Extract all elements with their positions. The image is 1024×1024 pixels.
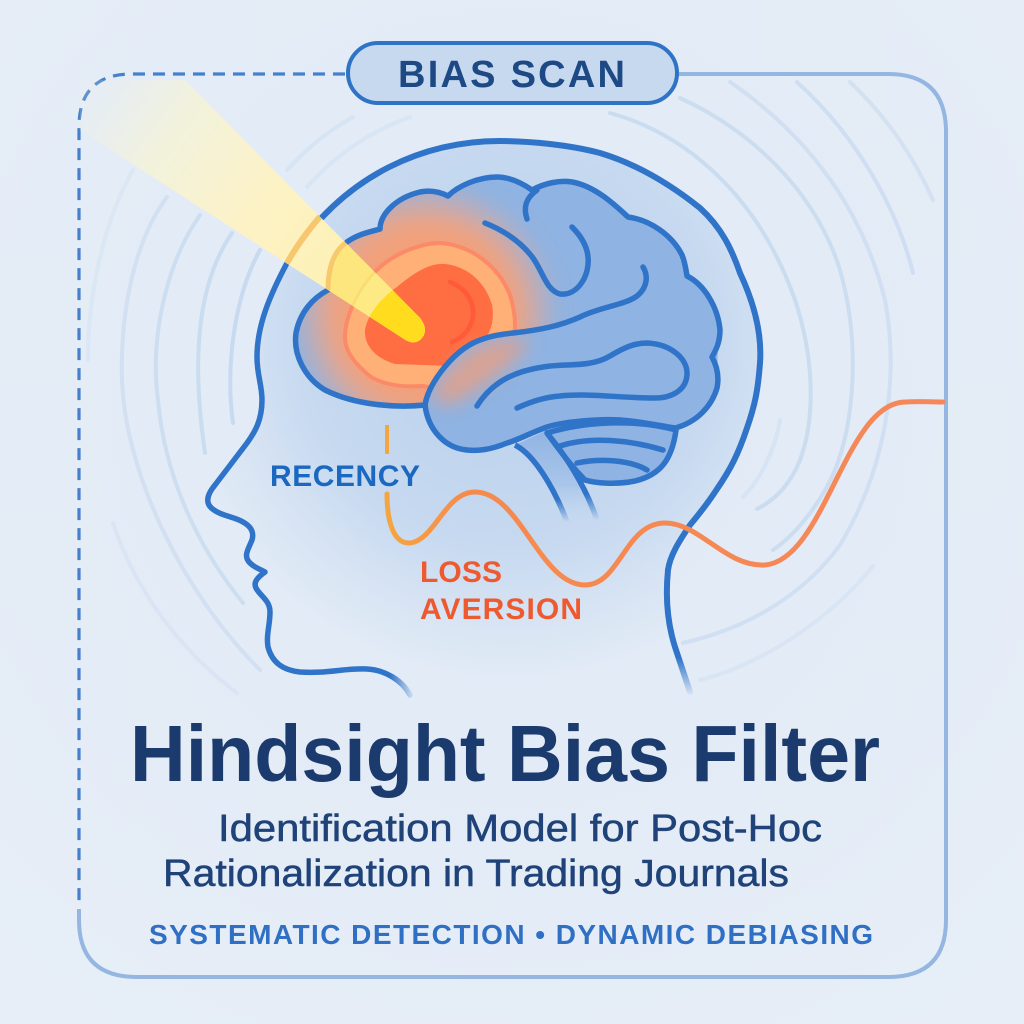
beam inside brain [328, 243, 425, 342]
head silhouette [208, 141, 760, 695]
stem left line [515, 445, 567, 522]
heat core [365, 264, 493, 366]
brain [290, 177, 720, 522]
stem right line [547, 433, 597, 520]
hot arc [450, 282, 473, 342]
heat ring [345, 243, 515, 395]
brain stem [515, 430, 597, 522]
beam inside ring [353, 283, 425, 342]
scanner beam [80, 80, 425, 342]
label: loss aversion [420, 556, 582, 626]
badge: bias scan [348, 43, 677, 103]
subtitle: Identification Model for Post-Hoc [218, 808, 822, 850]
subtitle [163, 808, 822, 895]
concentric scan arcs [88, 82, 933, 693]
tagline: SYSTEMATIC DETECTION • DYNAMIC DEBIASING [149, 919, 873, 950]
heat glow [298, 188, 559, 404]
bias signal wave [387, 402, 943, 585]
cerebellum [547, 423, 676, 483]
outlines under beam [284, 214, 376, 306]
badge: bias scan: BIAS SCAN [398, 54, 625, 96]
brain outlines and sulci [296, 177, 720, 470]
label: loss aversion: AVERSION [420, 593, 582, 626]
temporal heat glow [432, 338, 530, 405]
label: recency: RECENCY [270, 460, 420, 493]
subtitle: Rationalization in Trading Journals [163, 853, 789, 895]
temporal lobe [425, 267, 718, 450]
infographic canvas [77, 41, 948, 979]
label: loss aversion: LOSS [420, 556, 502, 589]
scan frame [79, 74, 946, 977]
title: Hindsight Bias Filter [130, 709, 880, 798]
brain lobes fill [296, 177, 720, 450]
beam core [370, 290, 425, 342]
